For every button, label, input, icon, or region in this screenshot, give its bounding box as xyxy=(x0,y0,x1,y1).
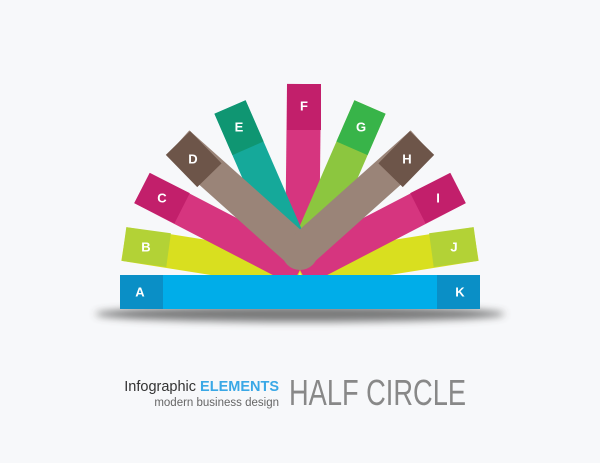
title text: Infographic ELEMENTS xyxy=(124,379,279,395)
letter labels: G xyxy=(356,120,366,134)
letter labels: D xyxy=(188,152,198,166)
letter labels: E xyxy=(235,120,244,134)
shadow xyxy=(95,306,505,322)
letter labels: A xyxy=(135,284,145,300)
letter labels: F xyxy=(300,98,308,114)
letter labels: C xyxy=(157,190,167,206)
title text xyxy=(124,372,466,413)
bar J xyxy=(300,244,476,272)
letter labels: B xyxy=(141,240,151,254)
letter labels: K xyxy=(455,284,465,300)
bar F xyxy=(302,84,304,268)
letter labels: H xyxy=(402,152,412,166)
bar C xyxy=(142,188,300,270)
bar E xyxy=(230,107,300,268)
bar G xyxy=(300,107,370,268)
title text: modern business design xyxy=(154,397,279,409)
bar I xyxy=(300,188,458,270)
bar A-K xyxy=(120,275,480,309)
bar B xyxy=(124,244,300,272)
title text: HALF CIRCLE xyxy=(289,372,466,413)
letter labels xyxy=(135,98,465,300)
letter labels: I xyxy=(436,190,440,206)
bars D and H (brown V) xyxy=(178,143,422,270)
letter labels: J xyxy=(450,240,458,254)
